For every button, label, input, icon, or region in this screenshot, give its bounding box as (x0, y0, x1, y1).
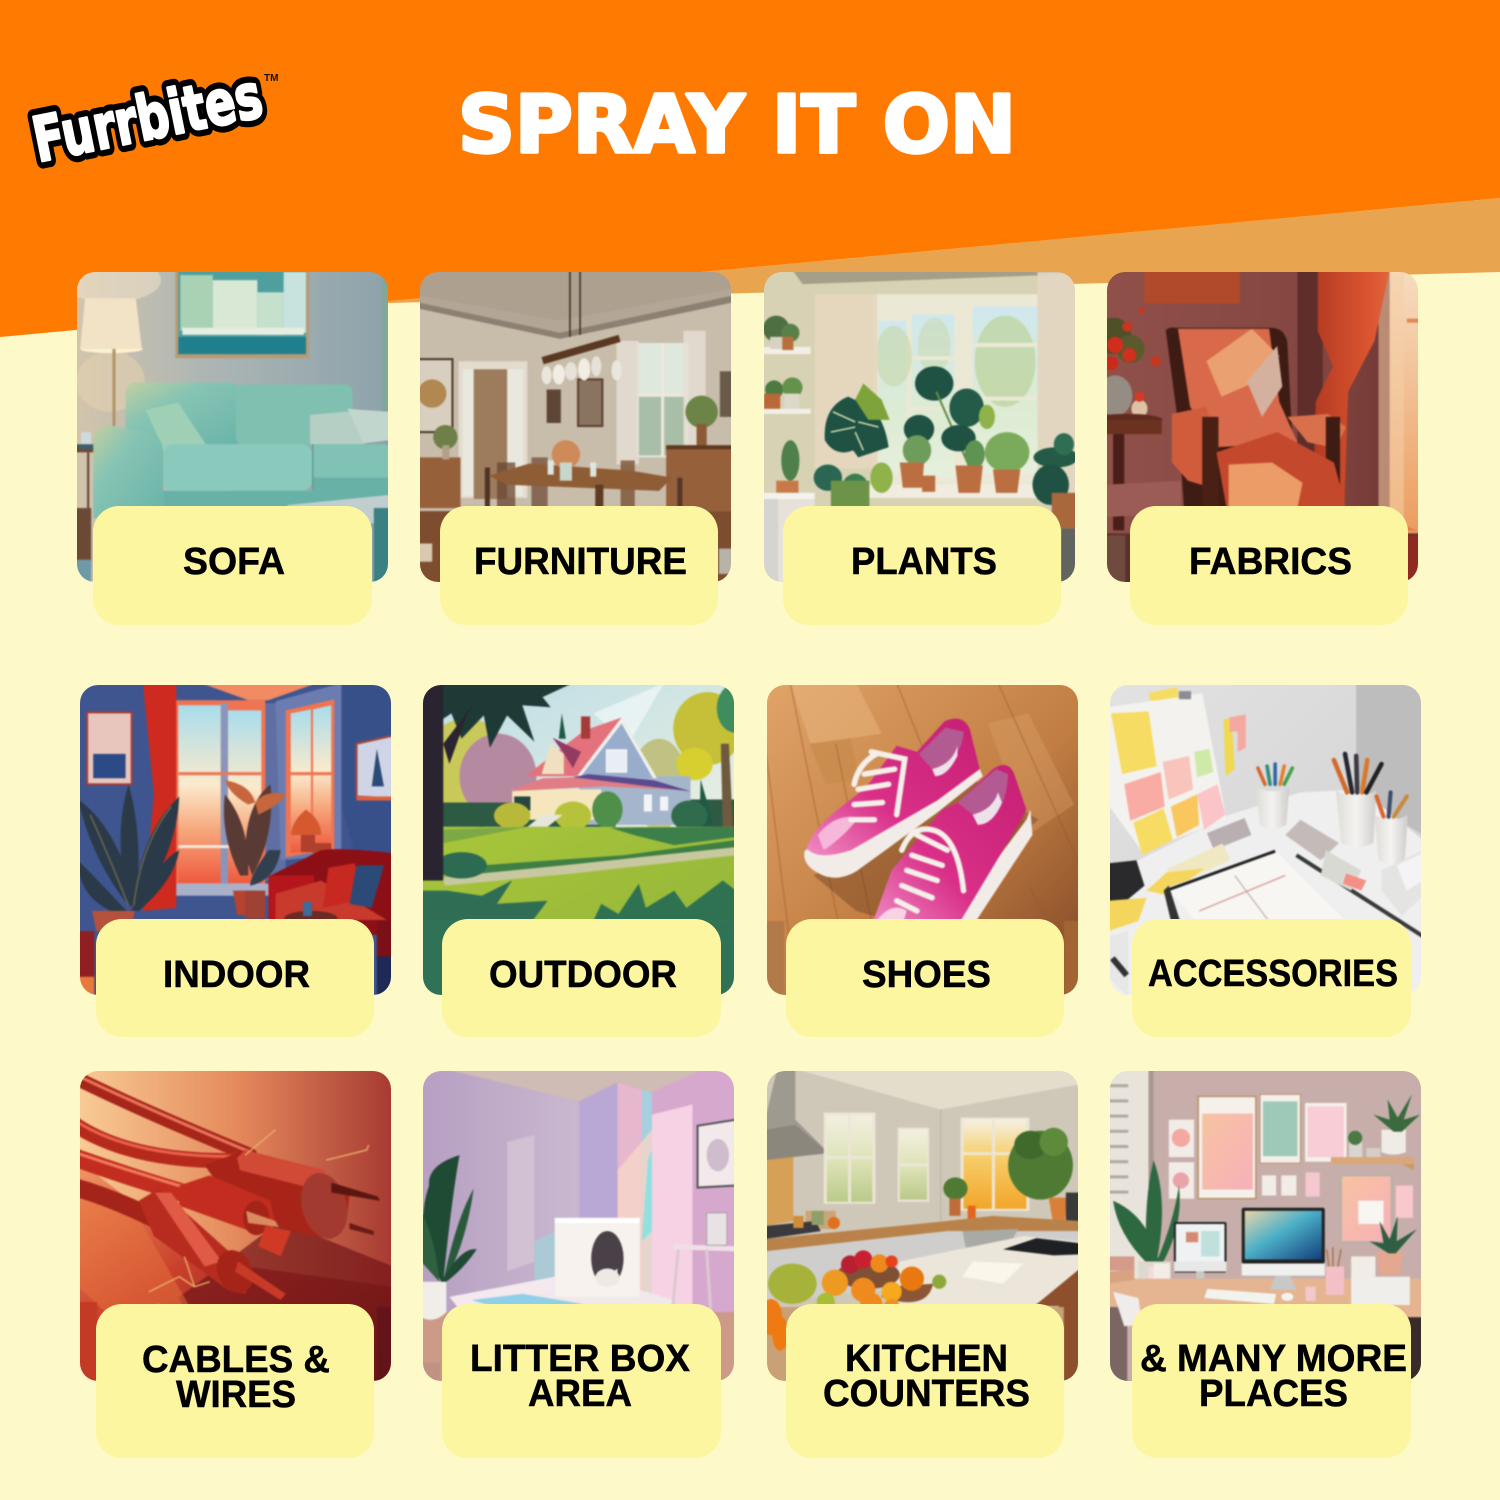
plug two (179, 1175, 276, 1231)
photo: teal sofa in living room (77, 272, 388, 582)
logo: Furrbites (26, 59, 278, 177)
card: sofa (60, 258, 390, 625)
plug three (139, 1189, 252, 1294)
photo: desk with sticky notes and pens (1108, 683, 1423, 997)
house (579, 776, 690, 825)
label: shoes (786, 919, 1064, 1037)
photo: red cables and plugs (68, 1069, 393, 1383)
photo: kitchen with fruit bowl (760, 1069, 1080, 1383)
label: outdoor (442, 919, 721, 1037)
label: kitchen counters: KITCHEN (845, 1338, 1008, 1380)
card: many more places (1108, 1069, 1423, 1458)
light orange header band (355, 198, 1500, 304)
photo: pink sneakers on wood floor (765, 683, 1080, 997)
label: litter box area: LITTER BOX (470, 1338, 691, 1380)
card: kitchen counters (760, 1069, 1080, 1458)
label: cables and wires: WIRES (176, 1374, 296, 1416)
photo: dining room (418, 270, 733, 584)
photo: blue room with red sofa (78, 683, 393, 997)
card: furniture (418, 270, 733, 625)
foreground tree (442, 685, 571, 748)
label: sofa (93, 506, 372, 625)
label: many more places: & MANY MORE (1140, 1338, 1407, 1380)
label: sofa: SOFA (183, 541, 285, 583)
label: indoor: INDOOR (163, 954, 310, 996)
lawn (423, 826, 734, 919)
label: litter box area (442, 1304, 721, 1458)
photo: armchair with blanket (1092, 270, 1420, 584)
card: shoes (765, 683, 1080, 1037)
photo: home office with posters (1108, 1069, 1423, 1383)
label: plants: PLANTS (851, 541, 997, 583)
label: many more places (1132, 1304, 1411, 1458)
card: litter box area (421, 1069, 736, 1458)
label: accessories (1132, 919, 1411, 1037)
right shoe (960, 810, 1034, 919)
label: indoor (96, 919, 374, 1037)
label: litter box area: AREA (528, 1373, 632, 1415)
label: outdoor: OUTDOOR (489, 954, 677, 996)
card: plants (762, 270, 1078, 625)
logo: Furrbites: TM (264, 73, 278, 84)
label: cables and wires (96, 1304, 374, 1458)
photo: potted plants by window (762, 270, 1078, 584)
orange header (0, 0, 1500, 337)
photo: pastel room with litter box (421, 1069, 736, 1383)
logo: Furrbites: Furrbites (26, 59, 268, 177)
label: shoes: SHOES (862, 954, 991, 996)
card: accessories (1108, 683, 1423, 1037)
photo: house and lawn (421, 683, 753, 997)
card: indoor (78, 683, 393, 1037)
label: accessories: ACCESSORIES (1148, 953, 1398, 995)
card: outdoor (421, 683, 753, 1037)
card: fabrics (1092, 270, 1420, 625)
title: SPRAY IT ON (458, 79, 1016, 171)
left shoe (804, 764, 983, 878)
logo: Furrbites: Furrbites (26, 59, 268, 177)
label: many more places: PLACES (1199, 1373, 1348, 1415)
label: cables and wires: CABLES & (142, 1339, 330, 1381)
card: cables and wires (68, 1069, 393, 1458)
label: fabrics (1130, 506, 1408, 625)
label: furniture (440, 506, 718, 625)
label: furniture: FURNITURE (474, 541, 687, 583)
plug one (205, 1150, 349, 1239)
label: kitchen counters: COUNTERS (823, 1373, 1030, 1415)
label: kitchen counters (786, 1304, 1064, 1458)
label: plants (783, 506, 1061, 625)
label: fabrics: FABRICS (1189, 541, 1352, 583)
